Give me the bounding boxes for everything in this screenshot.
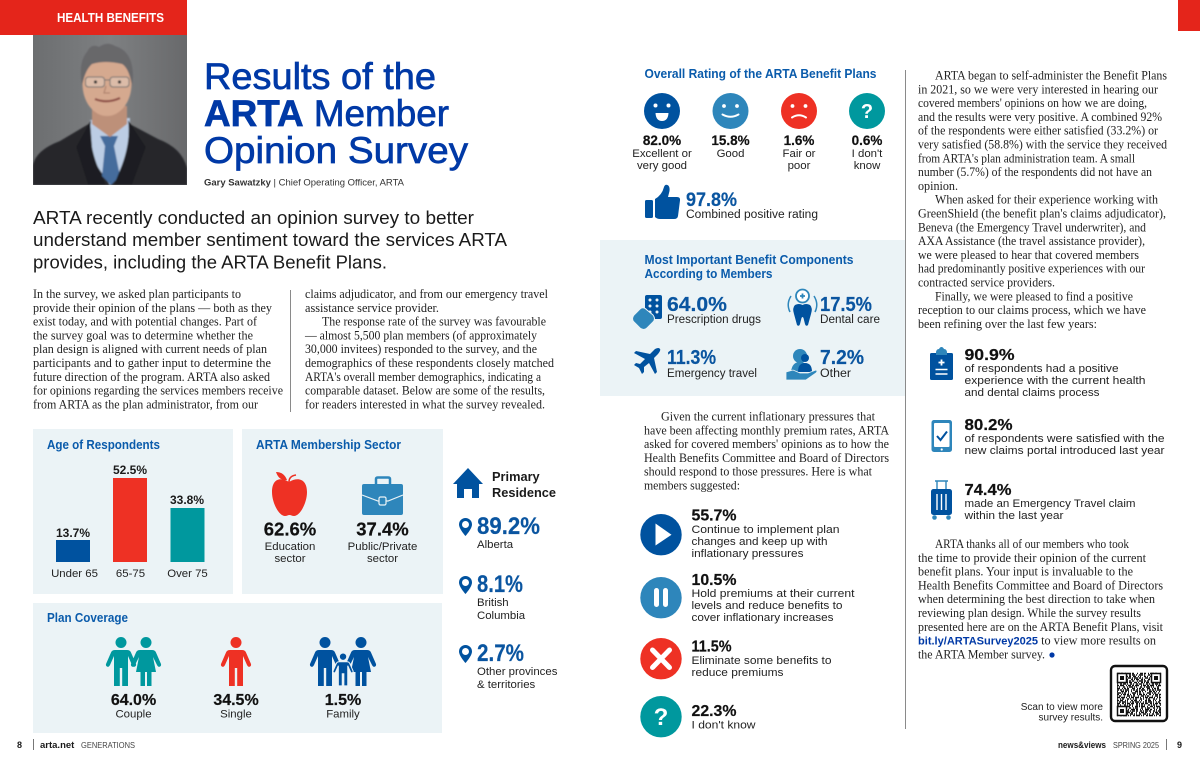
stat: combined positive [686, 190, 818, 221]
item: don't know: I don't know [692, 720, 756, 732]
intro text: provides, including the ARTA Benefit Plans. [33, 252, 387, 272]
intro text: understand member sentiment toward the services ARTA [33, 230, 507, 250]
icon: apple [272, 472, 307, 516]
stat: fair: poor [788, 160, 811, 172]
article column 1: provide their opinion of the plans — both as they [33, 301, 273, 315]
stat: family [325, 692, 361, 720]
item: clipboard stat [930, 347, 1146, 399]
stat: dental: Dental care [820, 314, 880, 326]
article: inflation paragraph: asked for covered members' opinions as to how the [644, 437, 889, 451]
item: continue: inflationary pressures [692, 548, 804, 560]
item: hold premiums: 10.5% [692, 572, 736, 589]
stat: excellent: 82.0% [643, 133, 681, 148]
item: eliminate: Eliminate some benefits to [692, 655, 832, 667]
stat: single [213, 692, 259, 720]
bar chart: Under 65 [51, 568, 98, 580]
heading: plan coverage: Plan Coverage [47, 611, 128, 625]
stat: prescription: Prescription drugs [667, 314, 761, 326]
stat: prescription: 64.0% [667, 294, 727, 316]
intro text [33, 208, 507, 272]
article column 2: 30,000 invitees) responded to the survey, and the [305, 342, 537, 356]
icon: house [453, 468, 483, 498]
panel: plan coverage [33, 603, 442, 733]
stat: other provinces: 2.7% [477, 640, 524, 667]
title [204, 56, 469, 171]
item: hold premiums [640, 572, 855, 624]
article: right column top: Beneva (the Emergency Travel underwriter), and [918, 220, 1146, 234]
item: continue: changes and keep up with [692, 536, 828, 548]
item: luggage stat: made an Emergency Travel claim [964, 498, 1136, 510]
icon: other care hand [786, 349, 817, 380]
article: right column closing: when determining the best direction to take when [918, 592, 1155, 606]
article column 1 [33, 287, 283, 411]
stat: couple: 64.0% [111, 692, 156, 709]
stat: couple: Couple [115, 708, 152, 720]
icon: dental [788, 290, 817, 326]
article column 2: demographics of these respondents closely matched [305, 356, 554, 370]
stat: public private: Public/Private [348, 541, 417, 553]
article column 1: exist today, and with potential changes. Part of [33, 315, 258, 329]
article: right column top: ARTA began to self-administer the Benefit Plans [935, 68, 1167, 82]
icon: briefcase [362, 478, 403, 515]
stat: public private: sector [367, 553, 398, 565]
stat: education: Education [265, 541, 315, 553]
title: Opinion Survey [204, 130, 469, 171]
footer left: 8 [17, 740, 22, 750]
article: right column top: we were pleased to hear that covered members [918, 248, 1139, 262]
article: right column closing: benefit plans. Your input is invaluable to the [918, 565, 1133, 579]
heading: age: Age of Respondents [47, 438, 160, 452]
article: right column top: When asked for their experience working with [935, 193, 1158, 207]
stat: don't know: 0.6% [852, 133, 882, 148]
article: inflation paragraph: members suggested: [644, 478, 740, 492]
item: luggage stat: 74.4% [964, 482, 1012, 499]
stat: good [711, 133, 750, 160]
article column 1: participants and to gather input to determine the [33, 356, 271, 370]
stat: other provinces: Other provinces [477, 666, 558, 678]
icon: family [310, 637, 376, 686]
stat: british columbia: 8.1% [477, 571, 523, 598]
stat: dental [820, 294, 880, 326]
article: right column top: of the respondents were either satisfied (33.2%) or [918, 124, 1158, 138]
icon: single person [221, 637, 251, 686]
heading: primary residence: Primary [492, 469, 540, 484]
stat: emergency travel: 11.3% [667, 347, 716, 369]
article: right column closing: ARTA thanks all of our members who took [935, 537, 1130, 551]
article: right column closing: bit.ly/ARTASurvey2025 to view more results on [918, 634, 1156, 648]
footer right [1058, 739, 1182, 751]
article: right column top: reception to our claims process, which we have [918, 303, 1146, 317]
stat: education: sector [274, 553, 306, 565]
article: right column closing: Health Benefits Committee and Board of Directors [918, 578, 1163, 592]
scan caption [1021, 702, 1103, 724]
panel: benefit components [600, 240, 905, 396]
footer left [17, 739, 135, 751]
article: right column top: contracted service providers. [918, 276, 1055, 290]
icon: thumbs up [645, 185, 680, 219]
bar chart: Over 75 [167, 568, 208, 580]
article column 1: from ARTA as the plan administrator, from our [33, 397, 258, 411]
stat: other [820, 347, 864, 380]
article column 2: assistance service provider. [305, 301, 439, 315]
item: hold premiums: cover inflationary increases [692, 612, 834, 624]
item: phone stat: 80.2% [964, 417, 1012, 434]
article column 2 [304, 287, 554, 411]
article: right column closing: the ARTA Member survey. [918, 647, 1045, 661]
stat: excellent: Excellent or [632, 148, 692, 160]
article: right column top: Finally, we were pleased to find a positive [935, 289, 1133, 303]
stat: alberta: 89.2% [477, 513, 540, 540]
stat: alberta [459, 513, 540, 551]
article column 2: comparable dataset. Below are some of the results, [305, 384, 545, 398]
intro text: ARTA recently conducted an opinion survey to better [33, 208, 474, 228]
item: eliminate: 11.5% [692, 639, 732, 656]
item: continue: 55.7% [692, 508, 736, 525]
article: right column top: covered members' opinions on how we are doing, [918, 96, 1147, 110]
item: eliminate [640, 638, 832, 679]
article: right column top: in 2021, so we were very interested in hearing our [918, 82, 1158, 96]
item: phone stat [932, 417, 1165, 457]
article: inflation paragraph [644, 410, 889, 492]
article: right column closing: presented here are on the ARTA Benefit Plans, visit [918, 620, 1164, 634]
icon: question mark [849, 93, 885, 129]
footer right: news&views [1058, 740, 1106, 751]
heading: benefit components: Most Important Benefit Components [644, 253, 854, 267]
stat: emergency travel [667, 347, 757, 380]
footer right: SPRING 2025 [1113, 740, 1159, 750]
list: member suggestions [640, 508, 855, 737]
heading: primary residence: Residence [492, 485, 556, 500]
article column 2: for readers interested in what the survey revealed. [305, 397, 545, 411]
bar chart: 52.5% [113, 463, 147, 477]
stat: family: 1.5% [325, 692, 361, 709]
vertical column divider [905, 70, 906, 729]
stat: public private [348, 518, 417, 565]
stat: combined positive: Combined positive rating [686, 209, 818, 221]
stat: excellent: very good [637, 160, 687, 172]
icon: very happy face [644, 93, 680, 129]
stat: don't know: know [854, 160, 881, 172]
item: clipboard stat: experience with the current health [964, 375, 1146, 387]
stat: don't know: I don't [852, 148, 883, 160]
article: right column top: opinion. [918, 179, 958, 193]
article column 2: ARTA's overall member demographics, indicating a [305, 370, 542, 384]
bar chart: 13.7% [56, 526, 90, 540]
stat: alberta: Alberta [477, 539, 514, 551]
article: right column top: number (5.7%) of the respondents did not have an [918, 165, 1152, 179]
item: clipboard stat: of respondents had a positive [964, 363, 1118, 375]
article: right column top [918, 68, 1167, 331]
item: hold premiums: Hold premiums at their current [692, 588, 855, 600]
stat: other provinces [459, 640, 558, 691]
article column 2: — almost 5,500 plan members (of approximately [304, 328, 538, 342]
article: right column closing: reviewing plan design. While the survey results [918, 606, 1141, 620]
bar chart [51, 463, 208, 580]
panel: age of respondents [33, 429, 233, 594]
article: right column top: and the results were very positive. A combined 92% [918, 110, 1162, 124]
stat: good: Good [717, 148, 744, 160]
icon: smiling face [712, 93, 748, 129]
list: claims stats [930, 347, 1165, 522]
footer right: 9 [1177, 740, 1182, 750]
stat: education: 62.6% [264, 518, 316, 540]
stat: family: Family [326, 708, 360, 720]
footer left: GENERATIONS [81, 740, 135, 750]
title: Results of the [204, 56, 436, 97]
stat: emergency travel: Emergency travel [667, 368, 757, 380]
author portrait photo [33, 35, 187, 185]
column divider [290, 290, 291, 412]
item: continue [640, 508, 840, 560]
article: right column top: AXA Assistance (the travel assistance provider), [918, 234, 1145, 248]
article: inflation paragraph: should respond to those pressures. Here is what [644, 465, 873, 479]
section tab: health benefits [0, 0, 187, 35]
stat: british columbia: Columbia [477, 610, 526, 622]
section tab: health benefits: HEALTH BENEFITS [57, 11, 164, 25]
bar chart: 65-75 [116, 568, 145, 580]
article: inflation paragraph: Health Benefits Committee and Board of Directors [644, 451, 889, 465]
footer left: arta.net [40, 740, 75, 751]
heading: overall rating: Overall Rating of the ARTA Benefit Plans [644, 67, 877, 81]
panel: membership sector [242, 429, 443, 594]
stat: fair: 1.6% [784, 133, 814, 148]
item: clipboard stat: and dental claims process [964, 387, 1100, 399]
icon: couple [106, 637, 161, 686]
stat: dental: 17.5% [820, 294, 872, 316]
item: luggage stat: within the last year [963, 510, 1064, 522]
article: right column top: from ARTA's plan administration team. A small [918, 151, 1136, 165]
article column 1: plan design is aligned with current needs of plan [33, 342, 267, 356]
item: luggage stat [931, 481, 1136, 522]
stat: good: 15.8% [711, 133, 750, 148]
item: continue: Continue to implement plan [692, 524, 840, 536]
heading: sector: ARTA Membership Sector [256, 438, 401, 452]
stat: other: Other [820, 368, 851, 380]
title: ARTA Member [204, 93, 449, 134]
stat: fair: Fair or [783, 148, 816, 160]
stat: fair [783, 133, 816, 172]
panel: overall rating [632, 67, 885, 221]
item: hold premiums: levels and reduce benefits to [692, 600, 842, 612]
article: right column top: very satisfied (58.8%) with the service they received [918, 138, 1167, 152]
scan caption: survey results. [1039, 712, 1103, 724]
icon: prescription pills [632, 295, 662, 330]
stat: british columbia [459, 571, 526, 622]
stat: british columbia: British [477, 597, 509, 609]
item: don't know [640, 696, 756, 737]
article column 1: future direction of the program. ARTA also asked [33, 370, 270, 384]
stat: single: Single [220, 708, 252, 720]
corner tab [1178, 0, 1200, 31]
article: inflation paragraph: Given the current inflationary pressures that [661, 410, 876, 424]
article column 1: In the survey, we asked plan participants to [33, 287, 241, 301]
byline: Gary Sawatzky | Chief Operating Officer, ARTA [204, 178, 405, 188]
item: don't know: 22.3% [692, 703, 736, 720]
stat: other provinces: & territories [477, 679, 536, 691]
stat: prescription [667, 294, 761, 326]
primary residence block [453, 468, 558, 691]
item: phone stat: new claims portal introduced last year [964, 445, 1165, 457]
icon: sad face [781, 93, 817, 129]
article: right column top: had predominantly positive experiences with our [918, 262, 1145, 276]
stat: combined positive: 97.8% [686, 190, 737, 211]
article: inflation paragraph: have been affecting monthly premium rates, ARTA [644, 423, 889, 437]
stat: don't know [852, 133, 883, 172]
article column 2: claims adjudicator, and from our emergency travel [305, 287, 549, 301]
item: eliminate: reduce premiums [692, 667, 784, 679]
article: right column closing [918, 537, 1164, 661]
icon: question mark: ? [861, 101, 873, 123]
icon: airplane [634, 348, 660, 374]
item: clipboard stat: 90.9% [964, 347, 1014, 364]
stat: public private: 37.4% [356, 518, 409, 540]
article: right column top: been refining over the last few years: [918, 317, 1097, 331]
QR code [1111, 666, 1167, 721]
panel: benefit components: According to Members [644, 267, 773, 281]
stat: single: 34.5% [213, 692, 259, 709]
article column 1: the survey goal was to determine whether the [33, 328, 253, 342]
item: don't know: ? [654, 704, 668, 731]
item: phone stat: of respondents were satisfied with the [964, 433, 1164, 445]
stat: excellent [632, 133, 692, 172]
article column 1: for opinions regarding the services members receive [33, 384, 283, 398]
article column 2: The response rate of the survey was favourable [322, 315, 546, 329]
stat: couple [111, 692, 156, 720]
bar chart: 33.8% [170, 493, 204, 507]
article: right column closing: the time to provide their opinion of the current [918, 551, 1147, 565]
article: right column top: GreenShield (the benefit plan's claims adjudicator), [918, 206, 1166, 220]
stat: other: 7.2% [820, 347, 864, 369]
scan caption: Scan to view more [1021, 702, 1103, 713]
stat: education [264, 518, 316, 565]
